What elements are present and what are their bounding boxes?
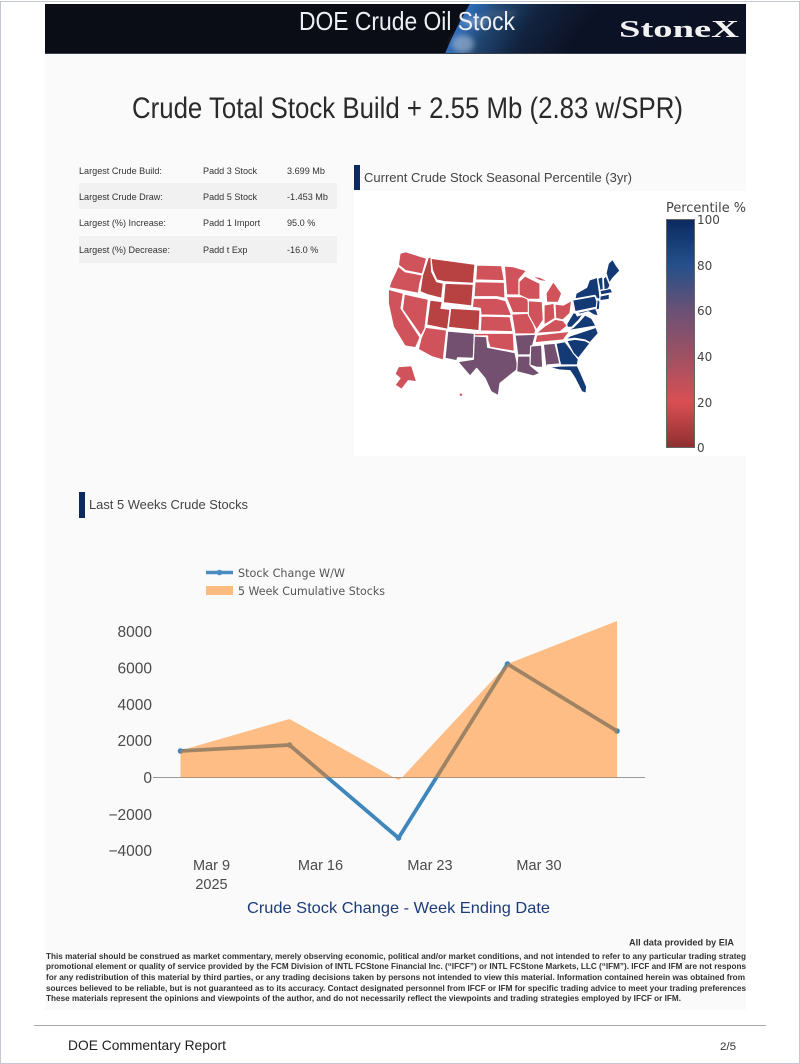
- x axis labels: Mar 16: [298, 858, 343, 874]
- row: largest percent increase: [79, 218, 315, 228]
- colorbar legend: 0: [697, 441, 705, 455]
- zero axis line: [153, 776, 645, 778]
- row: largest percent decrease: [79, 245, 318, 255]
- StoneX logo: StoneX: [619, 17, 740, 43]
- row: largest percent decrease: Largest (%) Decrease:: [79, 245, 170, 255]
- x axis labels: Mar 30: [516, 858, 562, 874]
- y axis labels: −4000: [108, 843, 152, 860]
- row: largest crude draw: -1.453 Mb: [287, 192, 328, 202]
- footer report name: DOE Commentary Report: [68, 1037, 226, 1053]
- choropleth map of US states: [388, 252, 620, 396]
- row: largest percent increase: 95.0 %: [287, 218, 315, 228]
- central states: [504, 266, 536, 334]
- colorbar legend: 80: [697, 259, 712, 273]
- y axis labels: 2000: [118, 733, 152, 750]
- chart legend: [206, 566, 385, 598]
- row: largest crude draw: Largest Crude Draw:: [79, 192, 163, 202]
- western states: [388, 252, 518, 397]
- row: largest percent decrease: -16.0 %: [287, 245, 318, 255]
- colorbar legend: 20: [697, 396, 712, 410]
- row: largest percent decrease: Padd t Exp: [203, 245, 248, 255]
- x axis labels: 2025: [195, 877, 228, 893]
- y axis labels: 8000: [118, 624, 152, 641]
- y axis labels: 4000: [118, 697, 152, 714]
- header banner: [45, 4, 746, 54]
- chart legend: Stock Change W/W: [238, 566, 345, 580]
- heading: last 5 weeks: [79, 492, 248, 518]
- heading: seasonal percentile: [354, 165, 632, 190]
- chart x axis title: Crude Stock Change - Week Ending Date: [247, 900, 550, 917]
- footer page number: 2/5: [720, 1041, 736, 1053]
- row: largest percent increase: Largest (%) Increase:: [79, 218, 166, 228]
- data source note: All data provided by EIA: [629, 936, 734, 948]
- y axis labels: 6000: [118, 660, 152, 678]
- x axis labels: Mar 23: [407, 858, 453, 874]
- chart legend: 5 Week Cumulative Stocks: [238, 584, 385, 598]
- x axis labels: [193, 858, 562, 893]
- disclaimer text: These materials represent the opinions and viewpoints of the author, and do not necessarily reflect the viewpoints and trading strategies employed by IFCF or IFM.: [46, 993, 681, 1003]
- footer rule: [34, 1025, 766, 1026]
- crude stocks chart: [108, 566, 645, 917]
- x axis labels: Mar 9: [193, 858, 230, 874]
- cumulative stocks area: [180, 621, 617, 780]
- row: largest crude build: 3.699 Mb: [287, 166, 325, 176]
- banner title: DOE Crude Oil Stock: [299, 6, 516, 36]
- disclaimer text: [46, 951, 746, 1003]
- map panel: [354, 191, 746, 456]
- colorbar legend: [666, 201, 746, 455]
- report background panel: [45, 54, 746, 1010]
- eastern states: [519, 259, 620, 393]
- row: largest crude build: Padd 3 Stock: [203, 166, 258, 176]
- row: largest crude draw: [79, 192, 328, 202]
- summary table: [79, 166, 337, 263]
- row: largest crude draw: Padd 5 Stock: [203, 192, 258, 202]
- colorbar legend: 100: [697, 213, 720, 227]
- row: largest percent increase: Padd 1 Import: [203, 218, 261, 228]
- y axis labels: [108, 624, 152, 860]
- colorbar title: Percentile %: [666, 201, 746, 216]
- y axis labels: 0: [143, 770, 152, 787]
- heading: last 5 weeks: Last 5 Weeks Crude Stocks: [89, 497, 248, 512]
- main headline: Crude Total Stock Build + 2.55 Mb (2.83 w/SPR): [132, 92, 683, 125]
- y axis labels: −2000: [108, 807, 152, 824]
- heading: seasonal percentile: Current Crude Stock Seasonal Percentile (3yr): [364, 170, 632, 185]
- row: largest crude build: [79, 166, 325, 176]
- stock change line: [178, 661, 620, 841]
- colorbar legend: 40: [697, 350, 712, 364]
- colorbar legend: 60: [697, 304, 712, 318]
- row: largest crude build: Largest Crude Build:: [79, 166, 162, 176]
